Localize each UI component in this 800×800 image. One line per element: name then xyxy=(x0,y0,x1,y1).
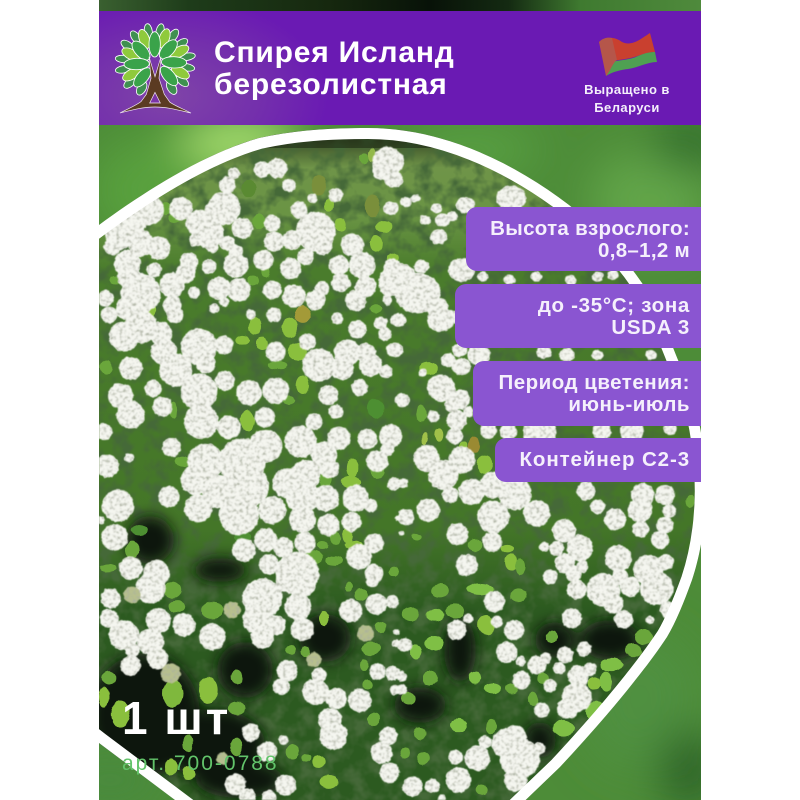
title xyxy=(214,36,455,101)
badge: container size: Контейнер С2-3 xyxy=(520,448,690,471)
logo: tree icon xyxy=(114,23,196,114)
white circle border xyxy=(60,128,706,800)
badge: adult height: 0,8–1,2 м xyxy=(598,238,690,262)
caption: grown in Belarus: Беларуси xyxy=(594,100,660,115)
badge: container size xyxy=(495,438,701,482)
badge: flowering period: июнь-июль xyxy=(568,392,690,416)
purple header banner xyxy=(99,11,701,125)
blurred green background photo with flower circle xyxy=(99,0,701,800)
badge: flowering period xyxy=(473,361,701,426)
badge: adult height: Высота взрослого: xyxy=(490,217,690,240)
dark shadows among leaves xyxy=(90,516,640,798)
badge: frost hardiness xyxy=(455,284,701,348)
icon: Belarus flag xyxy=(599,33,657,76)
caption: grown in Belarus xyxy=(584,82,670,115)
title: березолистная xyxy=(214,68,448,101)
top photo strip xyxy=(99,0,656,11)
badge: adult height xyxy=(466,207,701,271)
circular photo of spirea bush xyxy=(60,120,709,800)
badge: frost hardiness: до -35°С; зона xyxy=(538,294,690,317)
caption: grown in Belarus: Выращено в xyxy=(584,82,670,97)
badge: flowering period: Период цветения: xyxy=(498,371,690,394)
quantity label: 1 шт xyxy=(122,692,231,744)
badge: frost hardiness: USDA 3 xyxy=(611,316,690,338)
white flower clusters xyxy=(96,147,677,800)
leaves xyxy=(99,148,694,795)
article number: арт. 700-0788 xyxy=(122,752,279,775)
title: Спирея Исланд xyxy=(214,36,455,69)
